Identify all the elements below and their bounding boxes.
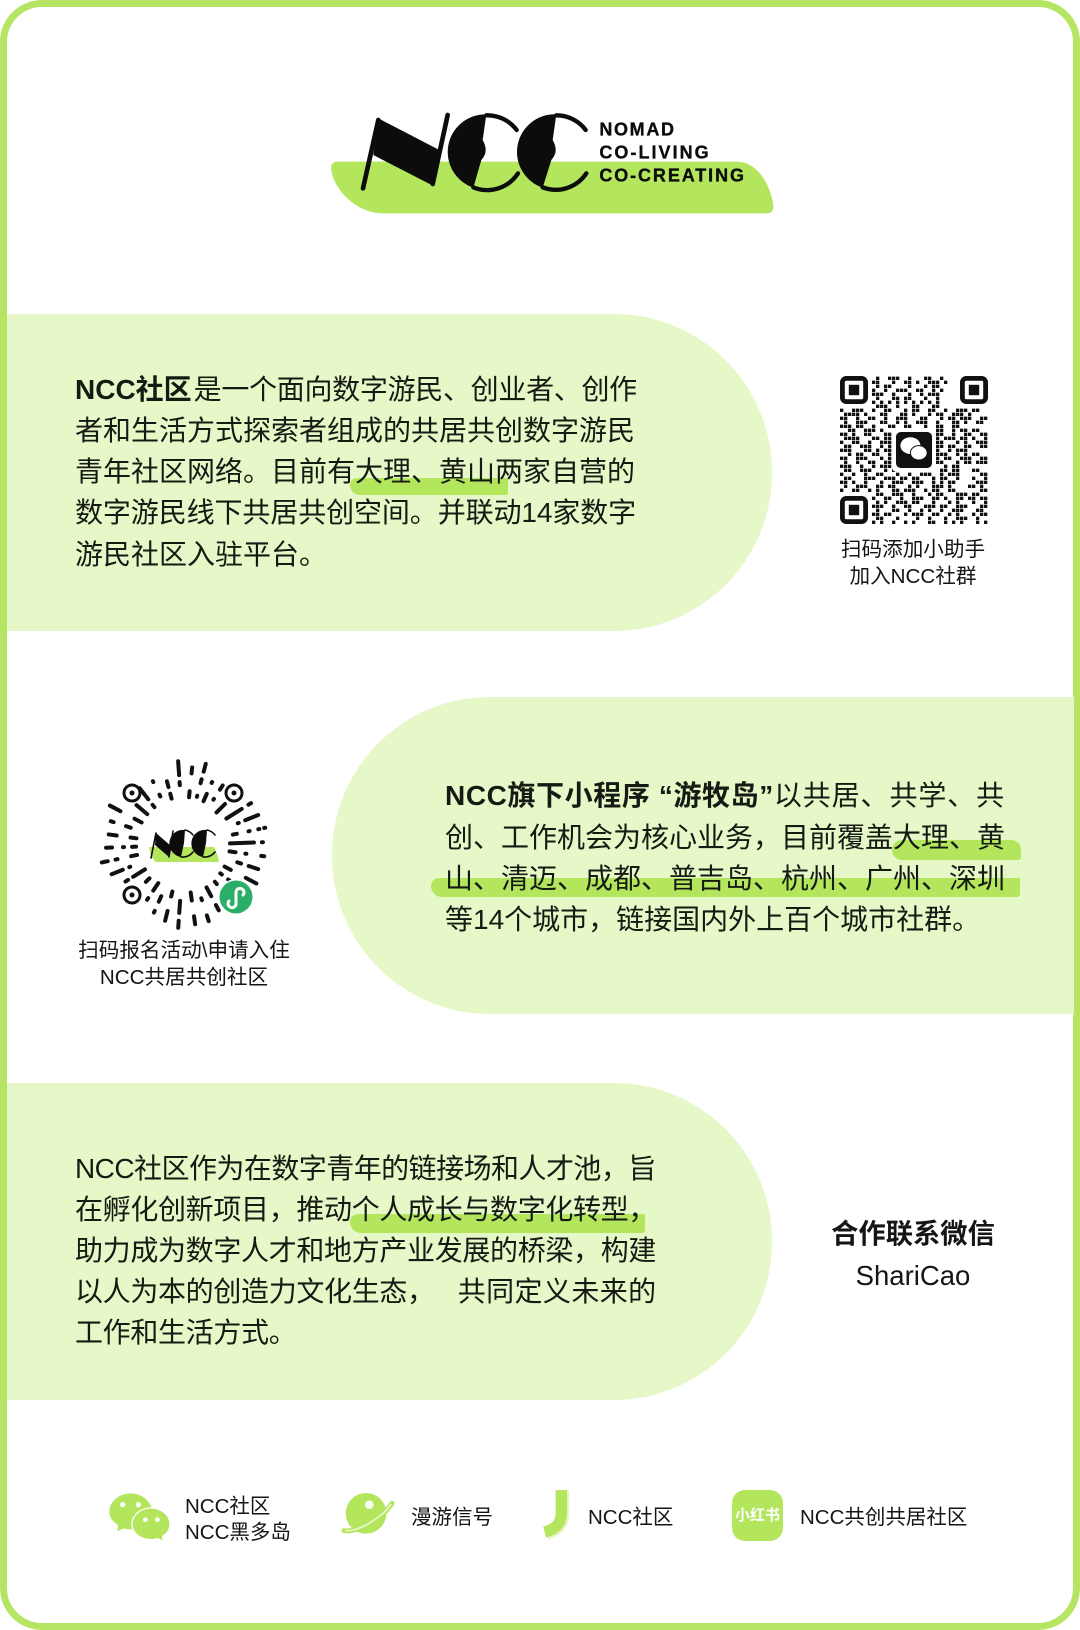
intro text: 者和生活方式探索者组成的共居共创数字游民 <box>75 415 635 446</box>
icon: WeChat <box>109 1493 170 1540</box>
label: WeChat accounts: NCC社区 <box>185 1495 270 1518</box>
radial code rays <box>102 761 265 928</box>
logo letters NCC <box>363 114 586 190</box>
contact heading: 合作联系微信 <box>831 1218 995 1249</box>
mini program caption <box>78 939 290 989</box>
mini program text: 创、工作机会为核心业务，目前覆盖大理、黄 <box>445 822 1005 853</box>
panel: mini program <box>332 697 1074 1014</box>
panel: mission <box>7 1083 772 1400</box>
label: WeChat accounts: NCC黑多岛 <box>185 1521 291 1544</box>
logo green swoosh <box>331 162 773 213</box>
icon: Xiaohongshu <box>732 1490 783 1541</box>
highlight: city list <box>431 878 1020 897</box>
mission text: 工作和生活方式。 <box>75 1317 296 1348</box>
mission text: NCC社区作为在数字青年的链接场和人才池，旨 <box>75 1153 656 1184</box>
QR caption: 加入NCC社群 <box>850 565 976 588</box>
logo tagline: CO-LIVING <box>599 143 709 163</box>
logo: NCC nomad co-living co-creating <box>331 112 774 214</box>
logo tagline <box>599 119 744 185</box>
center NCC logo <box>144 805 224 885</box>
icon: planet <box>342 1493 394 1534</box>
label: Jike account: NCC社区 <box>588 1506 673 1529</box>
mini program code <box>100 759 268 930</box>
mission text: 在孵化创新项目，推动个人成长与数字化转型， <box>75 1194 656 1225</box>
QR code: assistant <box>840 376 988 524</box>
intro text: 游民社区入驻平台。 <box>75 539 327 570</box>
QR module separators <box>840 376 988 524</box>
intro text: 青年社区网络。目前有大理、黄山两家自营的 <box>75 456 635 487</box>
panel: community intro <box>7 314 772 631</box>
mini program text: NCC旗下小程序 “游牧岛”以共居、共学、共 <box>445 780 1005 811</box>
QR caption <box>841 538 985 588</box>
QR modules <box>840 378 988 522</box>
highlight: Huang <box>892 840 1021 860</box>
label: WeChat accounts <box>185 1495 291 1544</box>
mission text: 以人为本的创造力文化生态， 共同定义未来的 <box>75 1276 657 1307</box>
highlight: Dali Huangshan <box>350 478 508 495</box>
intro text: NCC社区是一个面向数字游民、创业者、创作 <box>75 374 637 405</box>
mini program text: 山、清迈、成都、普吉岛、杭州、广州、深圳 <box>445 863 1005 894</box>
label: Xiaohongshu account: NCC共创共居社区 <box>800 1506 967 1529</box>
contact <box>831 1218 995 1291</box>
mini program badge <box>218 879 254 915</box>
icon: Xiaohongshu: 小红书 <box>735 1507 780 1524</box>
QR caption: 扫码添加小助手 <box>841 538 985 561</box>
logo tagline: CO-CREATING <box>599 165 744 185</box>
label: roaming signal: 漫游信号 <box>411 1506 493 1529</box>
contact WeChat id: ShariCao <box>856 1260 970 1291</box>
icon: WeChat in QR center <box>892 428 936 472</box>
mini program caption: NCC共居共创社区 <box>100 966 268 989</box>
code finder circles <box>124 785 242 903</box>
mini program caption: 扫码报名活动\申请入住 <box>78 939 290 962</box>
QR finder patterns <box>840 376 988 524</box>
intro text: 数字游民线下共居共创空间。并联动14家数字 <box>75 497 636 528</box>
logo tagline: NOMAD <box>599 119 674 139</box>
mission text <box>75 1153 657 1348</box>
icon: Jike J <box>543 1490 569 1540</box>
mission text: 助力成为数字人才和地方产业发展的桥梁，构建 <box>75 1235 656 1266</box>
mini program text <box>445 780 1005 935</box>
highlight: personal growth <box>350 1214 645 1233</box>
intro text <box>75 374 637 570</box>
mini program text: 等14个城市，链接国内外上百个城市社群。 <box>445 904 980 935</box>
